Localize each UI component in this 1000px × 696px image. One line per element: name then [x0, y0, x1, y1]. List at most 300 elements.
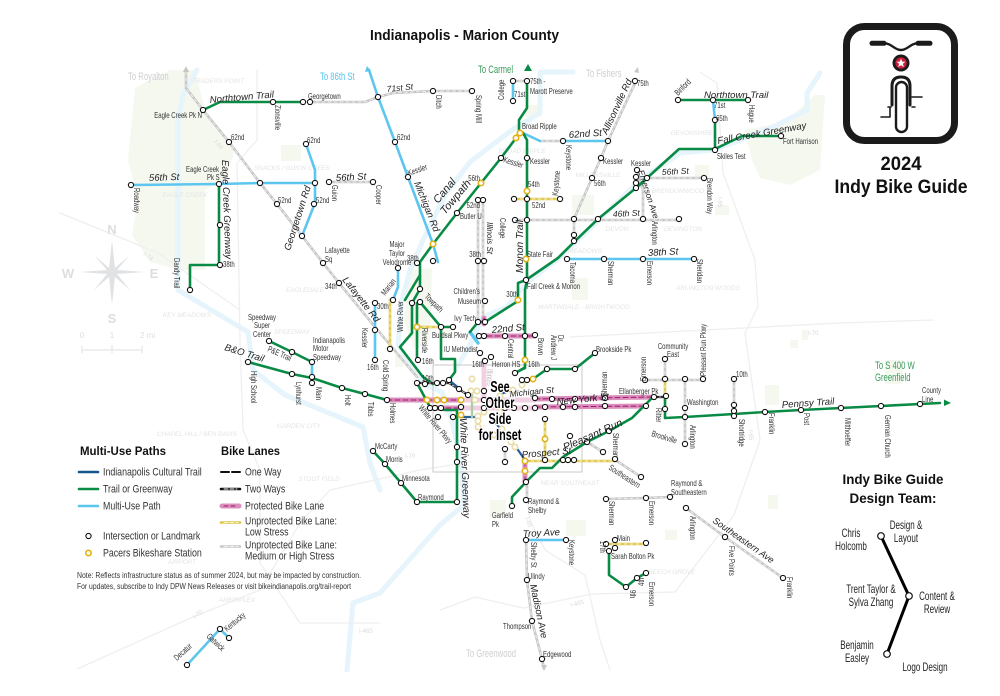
station labels: Brookville — [650, 428, 678, 446]
legend: multi-use paths: Indianapolis Cultural Trail — [103, 467, 202, 479]
design team line diagram: Design & — [890, 520, 923, 532]
legend: bike lanes: Unprotected Bike Lane: — [245, 516, 337, 528]
scale bar: 0 — [80, 331, 85, 340]
station labels: Keystone — [567, 540, 577, 565]
neighborhood labels: KEY MEADOWS — [163, 312, 212, 319]
design team line diagram: Sylva Zhang — [849, 597, 893, 609]
street and trail names: Georgetown Rd — [282, 184, 314, 252]
station labels: Zionsville — [273, 105, 283, 130]
destination labels — [128, 64, 915, 660]
highway labels: I-465 — [570, 599, 585, 609]
station labels: Pleasant Run Pkwy — [698, 324, 708, 376]
highway labels: I-74 — [142, 252, 154, 263]
station labels: Illinois — [485, 369, 495, 386]
station labels: Spring Mill — [474, 95, 484, 123]
destination labels: To 86th St — [320, 71, 355, 83]
station labels: 34th — [325, 281, 337, 291]
station labels: 56th — [468, 173, 480, 183]
destination labels: To Fishers — [586, 68, 622, 80]
design team line diagram: Content & — [919, 591, 955, 603]
destination labels: To Greenwood — [466, 648, 516, 660]
station labels: 38th — [469, 249, 481, 259]
faded downtown lanes — [462, 360, 535, 408]
trail: Towpath south — [420, 302, 455, 380]
highway labels: I-465 — [359, 629, 373, 635]
design team heading: Indy Bike Guide — [842, 471, 944, 487]
neighborhood labels: DEVON — [606, 226, 629, 233]
station labels: 54th — [528, 179, 540, 189]
station labels: Washington — [687, 397, 719, 407]
station labels: Keystone — [564, 145, 574, 170]
street and trail names: Canal — [431, 176, 459, 206]
station labels: Burdsal Pkwy — [432, 330, 469, 340]
station labels: Marian — [379, 277, 398, 297]
station labels: Central — [506, 339, 516, 359]
legend: bike lanes: Bike Lanes — [221, 444, 280, 458]
highway labels: I-70 — [192, 609, 205, 621]
street and trail names: Monon Trail — [515, 219, 526, 273]
station labels: White River — [395, 301, 405, 332]
station labels: State Fair — [527, 249, 553, 259]
neighborhood labels: EAGLEDALE — [286, 287, 325, 294]
legend: multi-use paths — [79, 444, 202, 560]
street and trail names: Lafayette Rd — [340, 275, 382, 325]
design team line diagram: Trent Taylor & — [846, 584, 896, 596]
street and trail names: Emerson Ave — [636, 169, 661, 220]
station labels: Holmes — [388, 403, 398, 424]
station labels: Community — [658, 341, 688, 351]
station labels: Eagle Creek Pk N — [154, 110, 202, 120]
station labels: 16th — [472, 359, 484, 369]
path: 71st — [713, 100, 715, 120]
station labels: Lynhurst — [294, 382, 304, 405]
station labels: Sheridan — [695, 259, 705, 283]
station labels: Emerson — [647, 501, 657, 525]
street and trail names: Troy Ave — [523, 527, 560, 540]
station labels: High School — [249, 371, 259, 404]
station labels: Guion — [330, 185, 340, 201]
station labels: Raymond — [418, 492, 444, 502]
station labels: 16th — [528, 359, 540, 369]
station labels: Museum — [458, 296, 481, 306]
station labels: Riverside — [420, 328, 430, 353]
legend: bike lanes: Two Ways — [245, 484, 285, 496]
station labels: College — [498, 218, 508, 238]
station labels: Kentucky — [222, 610, 248, 634]
station labels: Raymond & — [671, 478, 702, 488]
station labels: Post — [802, 413, 812, 425]
trail: Eagle Creek Greenway — [190, 184, 219, 290]
neighborhood labels: DEVINGTON — [664, 226, 702, 233]
street and trail names: 38th St — [648, 246, 679, 259]
legend: multi-use paths: Intersection or Landmark — [103, 531, 200, 543]
station labels: Cold Spring — [381, 360, 391, 391]
legend: bike lanes: Unprotected Bike Lane: — [245, 540, 337, 552]
highway labels: I-65 — [212, 139, 224, 152]
station labels: Five Points — [727, 546, 737, 576]
cultural trail and two way connectors — [417, 336, 666, 460]
neighborhood labels: MEADOWS — [568, 248, 603, 255]
station labels: Pk — [492, 519, 499, 529]
neighborhood labels — [157, 78, 741, 604]
station labels: Decatur — [172, 641, 195, 663]
station labels: Arlington — [688, 516, 698, 540]
street and trail names: Prospect St — [521, 446, 572, 461]
protected bike lanes — [387, 318, 654, 482]
station labels: Pk S — [207, 172, 220, 182]
design team line diagram: Easley — [845, 653, 869, 665]
neighborhood labels: SNACKS / GUION CREEK — [254, 165, 331, 172]
street and trail names: Michigan St — [509, 384, 555, 399]
destination labels: To Royalton — [128, 71, 169, 83]
station labels: Major — [389, 239, 405, 249]
station labels: Super — [254, 320, 270, 330]
street and trail names — [149, 77, 836, 639]
station labels: Sarah Bolton Pk — [611, 551, 655, 561]
trail: Northtown east — [678, 100, 748, 150]
street and trail names: Madison Ave — [527, 583, 549, 639]
street and trail names: Pennsy Trail — [781, 396, 836, 411]
neighborhood labels: SPEEDWAY — [274, 329, 311, 336]
legend: bike lanes — [221, 444, 337, 563]
station labels: Fall Creek & Monon — [527, 281, 580, 291]
trail: Central Canal 16th — [533, 353, 595, 379]
scale bar: 1 — [110, 331, 115, 340]
path: 38th St — [567, 258, 694, 260]
station labels: Children's — [453, 286, 480, 296]
station labels: Ellanberger Pk — [619, 386, 659, 396]
street and trail names: 46th St — [613, 208, 641, 219]
street and trail names: White River Greenway — [457, 418, 472, 519]
station labels: Emerson — [647, 582, 657, 606]
station labels: 62nd — [397, 132, 410, 142]
street and trail names: Southeastern Ave — [711, 515, 776, 565]
highway labels: I-70 — [808, 331, 819, 337]
station labels: Holt — [343, 395, 353, 406]
legend: bike lanes: Medium or High Stress — [245, 551, 334, 563]
station labels: Southeastern — [607, 462, 642, 490]
station labels: 10th — [736, 369, 748, 379]
station labels: Center — [253, 329, 271, 339]
station labels: 62nd — [231, 132, 244, 142]
medium or high stress bike lanes — [186, 72, 783, 668]
station labels: Andrew J — [549, 335, 559, 360]
design team line diagram: Layout — [894, 533, 918, 545]
path: Main — [311, 362, 313, 383]
station labels: Sherman — [607, 501, 617, 525]
station labels: Kessler — [603, 156, 623, 166]
station labels: Towpath — [422, 291, 446, 314]
station labels: Speedway — [248, 312, 276, 322]
station labels: Lafayette — [325, 245, 350, 255]
station labels: Dandy Trail — [172, 258, 182, 289]
street and trail names: Northtown Trail — [704, 90, 769, 101]
destination labels: To S 400 W — [875, 360, 915, 372]
station labels: Georgetown — [308, 91, 341, 101]
neighborhood labels: NEAR SOUTHEAST — [541, 480, 600, 487]
legend: bike lanes: Low Stress — [245, 527, 289, 539]
neighborhood labels: MILLERSVILLE — [576, 172, 621, 179]
path: Michigan Rd — [369, 70, 438, 262]
street and trail names: 56th St — [336, 171, 367, 184]
trail: Sarah Bolton — [609, 551, 646, 587]
station labels: 52nd — [467, 200, 480, 210]
station labels: Kessler — [406, 161, 429, 178]
station labels: Cooper — [374, 185, 384, 205]
station labels: 38th — [407, 253, 419, 263]
inset note: Side — [489, 410, 511, 427]
station labels: Tacoma — [568, 262, 578, 284]
trail: Pleasant Run — [512, 397, 653, 506]
design team line diagram: Chris — [842, 528, 860, 540]
path: Decatur — [187, 629, 229, 665]
station labels: Indianapolis — [313, 335, 345, 345]
station labels: Franklin — [767, 413, 777, 434]
station labels: Ritter — [654, 408, 664, 423]
neighborhood labels: AMERIPLEX — [218, 597, 256, 604]
design team line diagram: Review — [924, 604, 951, 616]
neighborhood labels: BEECH GROVE — [649, 569, 696, 576]
street and trail names: Northtown Trail — [209, 89, 275, 106]
station labels: Skiles Test — [717, 151, 746, 161]
street and trail names: 62nd St — [568, 128, 603, 141]
guide title — [834, 154, 968, 198]
station labels: Line — [922, 394, 933, 404]
station labels: Brookside Pk — [596, 344, 632, 354]
faded downtown stations — [468, 376, 525, 450]
street and trail names: Pleasant Run — [561, 417, 624, 454]
station labels: Dr. — [556, 335, 566, 343]
neighborhood labels: TRADERS POINT — [192, 78, 245, 85]
path: Georgetown Rd — [302, 144, 315, 236]
station labels: Sherman — [606, 261, 616, 285]
station labels: Arlington — [688, 425, 698, 449]
station labels: 71st — [514, 89, 525, 99]
inset note: See — [490, 378, 510, 395]
icon: bicycle logo — [846, 26, 954, 140]
station labels: 52nd — [532, 200, 545, 210]
highway labels: I-70 — [405, 454, 416, 460]
station labels: Fort Harrison — [783, 136, 818, 146]
station labels: 38th — [223, 259, 235, 269]
compass rose: W — [62, 266, 75, 281]
station labels: Mitthoeffer — [843, 418, 853, 447]
trail: Monon — [515, 133, 527, 373]
multi-use paths — [131, 70, 715, 665]
station labels: 56th — [594, 178, 606, 188]
station labels: Binford — [672, 77, 693, 98]
inset note — [479, 378, 522, 443]
inset note: for Inset — [479, 426, 522, 443]
scale bar: 2 mi — [140, 331, 155, 340]
station labels: Southeastern — [671, 487, 707, 497]
station labels: Sherman — [599, 372, 609, 396]
station labels: Brendon Way — [705, 178, 715, 214]
design team line diagram: Holcomb — [835, 541, 867, 553]
compass rose: S — [108, 311, 117, 326]
street and trail names: Michigan Rd — [411, 180, 442, 234]
trail: Canal Towpath — [405, 81, 527, 300]
station labels: Marott Preserve — [530, 86, 573, 96]
neighborhood labels: DEVONSHIRE — [671, 130, 714, 137]
trail: Pennsy — [665, 396, 940, 418]
station labels: 75th — [637, 78, 649, 88]
note: For updates, subscribe to Indy DPW News Releases or visit bikeindianapolis.org/trail-report — [77, 582, 352, 591]
station labels: IU Methodist — [444, 344, 478, 354]
station labels: 10th — [422, 373, 434, 383]
title: Indianapolis - Marion County — [370, 28, 559, 44]
station labels: Butler U — [460, 211, 482, 221]
station labels: Main — [617, 533, 630, 543]
legend: multi-use paths: Trail or Greenway — [103, 484, 173, 496]
station labels: Emerson — [638, 357, 648, 381]
compass rose: E — [150, 266, 159, 281]
legend: multi-use paths: Pacers Bikeshare Station — [103, 548, 202, 560]
station labels: Tibbs — [366, 402, 376, 417]
station labels: Kessler — [360, 328, 370, 348]
street and trail names: 71st St — [386, 81, 414, 94]
station labels: Kessler — [502, 154, 525, 171]
station labels: 17th — [598, 541, 608, 553]
pacers bikeshare stations — [414, 130, 548, 474]
station labels: Garfield — [492, 510, 513, 520]
legend: multi-use paths: Multi-Use Path — [103, 501, 161, 513]
low stress bike lanes — [390, 199, 665, 544]
path: 62nd St — [523, 133, 608, 141]
station labels: Taylor — [389, 248, 405, 258]
trail: White River north — [400, 275, 433, 384]
legend: multi-use paths: Multi-Use Paths — [80, 444, 166, 458]
trail: B&O — [248, 362, 387, 400]
station labels: 71st — [714, 100, 725, 110]
path: Ivy Tech link — [470, 332, 478, 343]
station labels: Roadway — [132, 188, 142, 213]
station labels: Gatwick — [204, 631, 227, 653]
station labels: White River Pkwy — [416, 403, 455, 446]
station labels: 30th — [377, 301, 389, 311]
inset box — [433, 365, 582, 472]
neighborhood labels: BRENDONWOOD — [652, 188, 705, 195]
station labels: Raymond & — [528, 496, 559, 506]
station labels: P&E Trail — [266, 344, 293, 363]
legend: bike lanes: One Way — [245, 467, 281, 479]
station labels: Speedway — [313, 352, 341, 362]
station labels: Emerson — [645, 261, 655, 285]
street and trail names: Eagle Creek Greenway — [219, 160, 233, 260]
street and trail names: 22nd St — [490, 322, 526, 336]
station labels: Kessler — [530, 156, 550, 166]
station labels: Edgewood — [543, 649, 571, 659]
station labels: Brown — [536, 338, 546, 355]
neighborhood labels: GARDEN CITY — [277, 423, 322, 430]
station labels: Sq — [325, 254, 332, 264]
station labels: Ivy Tech — [454, 313, 476, 323]
trails and greenways — [190, 81, 940, 587]
station labels: Ulindy — [528, 571, 545, 581]
station labels: Velodrome — [383, 257, 411, 267]
station labels: 30th — [506, 289, 518, 299]
path: Troy Ave — [526, 539, 566, 541]
station labels: Broad Ripple — [522, 121, 557, 131]
highways — [60, 70, 933, 670]
scale bar — [80, 331, 155, 353]
neighborhood labels: STOUT FIELD — [298, 476, 340, 483]
station labels: Eagle Creek — [186, 164, 219, 174]
station labels: Keystone — [550, 170, 562, 196]
design team line diagram: Logo Design — [902, 662, 948, 674]
station labels: 52nd — [316, 195, 329, 205]
station labels: Shelby St — [529, 542, 539, 568]
street and trail names: Towpath — [438, 178, 474, 217]
station labels: Sherman — [611, 433, 621, 457]
station labels: Shelby — [528, 505, 547, 515]
neighborhood labels: EAGLE CREEK — [162, 192, 208, 199]
station labels: Main — [314, 387, 324, 400]
neighborhood labels: ARLINGTON WOODS — [675, 285, 741, 292]
intersections and landmarks — [128, 78, 923, 668]
highway labels — [142, 139, 819, 635]
neighborhood labels: BROAD RIPPLE — [498, 148, 546, 155]
station labels: 65th — [716, 113, 728, 123]
station labels: German Church — [883, 415, 893, 458]
design team line diagram — [835, 520, 955, 674]
trail: Northtown west — [203, 102, 303, 110]
neighborhood labels: MARTINDALE - BRIGHTWOOD — [538, 304, 630, 311]
highway labels: I-65 — [523, 517, 533, 529]
trail: P&E — [269, 341, 312, 362]
station labels: McCarty — [375, 441, 398, 451]
station labels: 75th - — [530, 76, 546, 86]
rivers and creeks — [178, 70, 820, 670]
path: Kessler — [374, 303, 376, 360]
station labels: Shortridge — [737, 419, 747, 447]
station labels: 16th — [367, 362, 379, 372]
highway labels: I-65 — [716, 197, 722, 208]
design team heading — [842, 471, 944, 506]
path: 56th St west — [131, 183, 315, 185]
guide title: 2024 — [880, 154, 922, 175]
guide title: Indy Bike Guide — [834, 177, 968, 198]
station labels: East — [667, 349, 679, 359]
street and trail names: Allisonville Rd — [599, 77, 635, 137]
station labels: Minnesota — [402, 473, 430, 483]
legend: bike lanes: Protected Bike Lane — [245, 501, 325, 513]
path: Marian — [393, 268, 398, 300]
destination labels: Greenfield — [875, 372, 910, 384]
station labels: 9th — [628, 590, 638, 598]
trail: Fall Creek — [470, 136, 781, 332]
station labels — [132, 76, 941, 663]
destination labels: To Carmel — [478, 64, 513, 76]
parks background — [128, 70, 903, 540]
design team line diagram: Benjamin — [840, 640, 874, 652]
compass rose: N — [107, 222, 117, 237]
station labels: Motor — [313, 343, 329, 353]
street and trail names: 56th St — [662, 166, 690, 177]
station labels: 16th — [422, 356, 434, 366]
station labels: 52nd — [278, 195, 291, 205]
street and trail names: Fall Creek Greenway — [717, 120, 808, 147]
compass rose — [62, 222, 159, 326]
station labels: College — [496, 80, 506, 100]
design team heading: Design Team: — [850, 490, 936, 506]
station labels: Kessler — [631, 158, 651, 168]
station labels: Hague — [747, 105, 757, 123]
note — [77, 571, 361, 591]
street and trail names: Illinois St — [485, 222, 494, 255]
station labels: 4th — [636, 578, 646, 586]
street and trail names: 56th St — [149, 172, 180, 184]
